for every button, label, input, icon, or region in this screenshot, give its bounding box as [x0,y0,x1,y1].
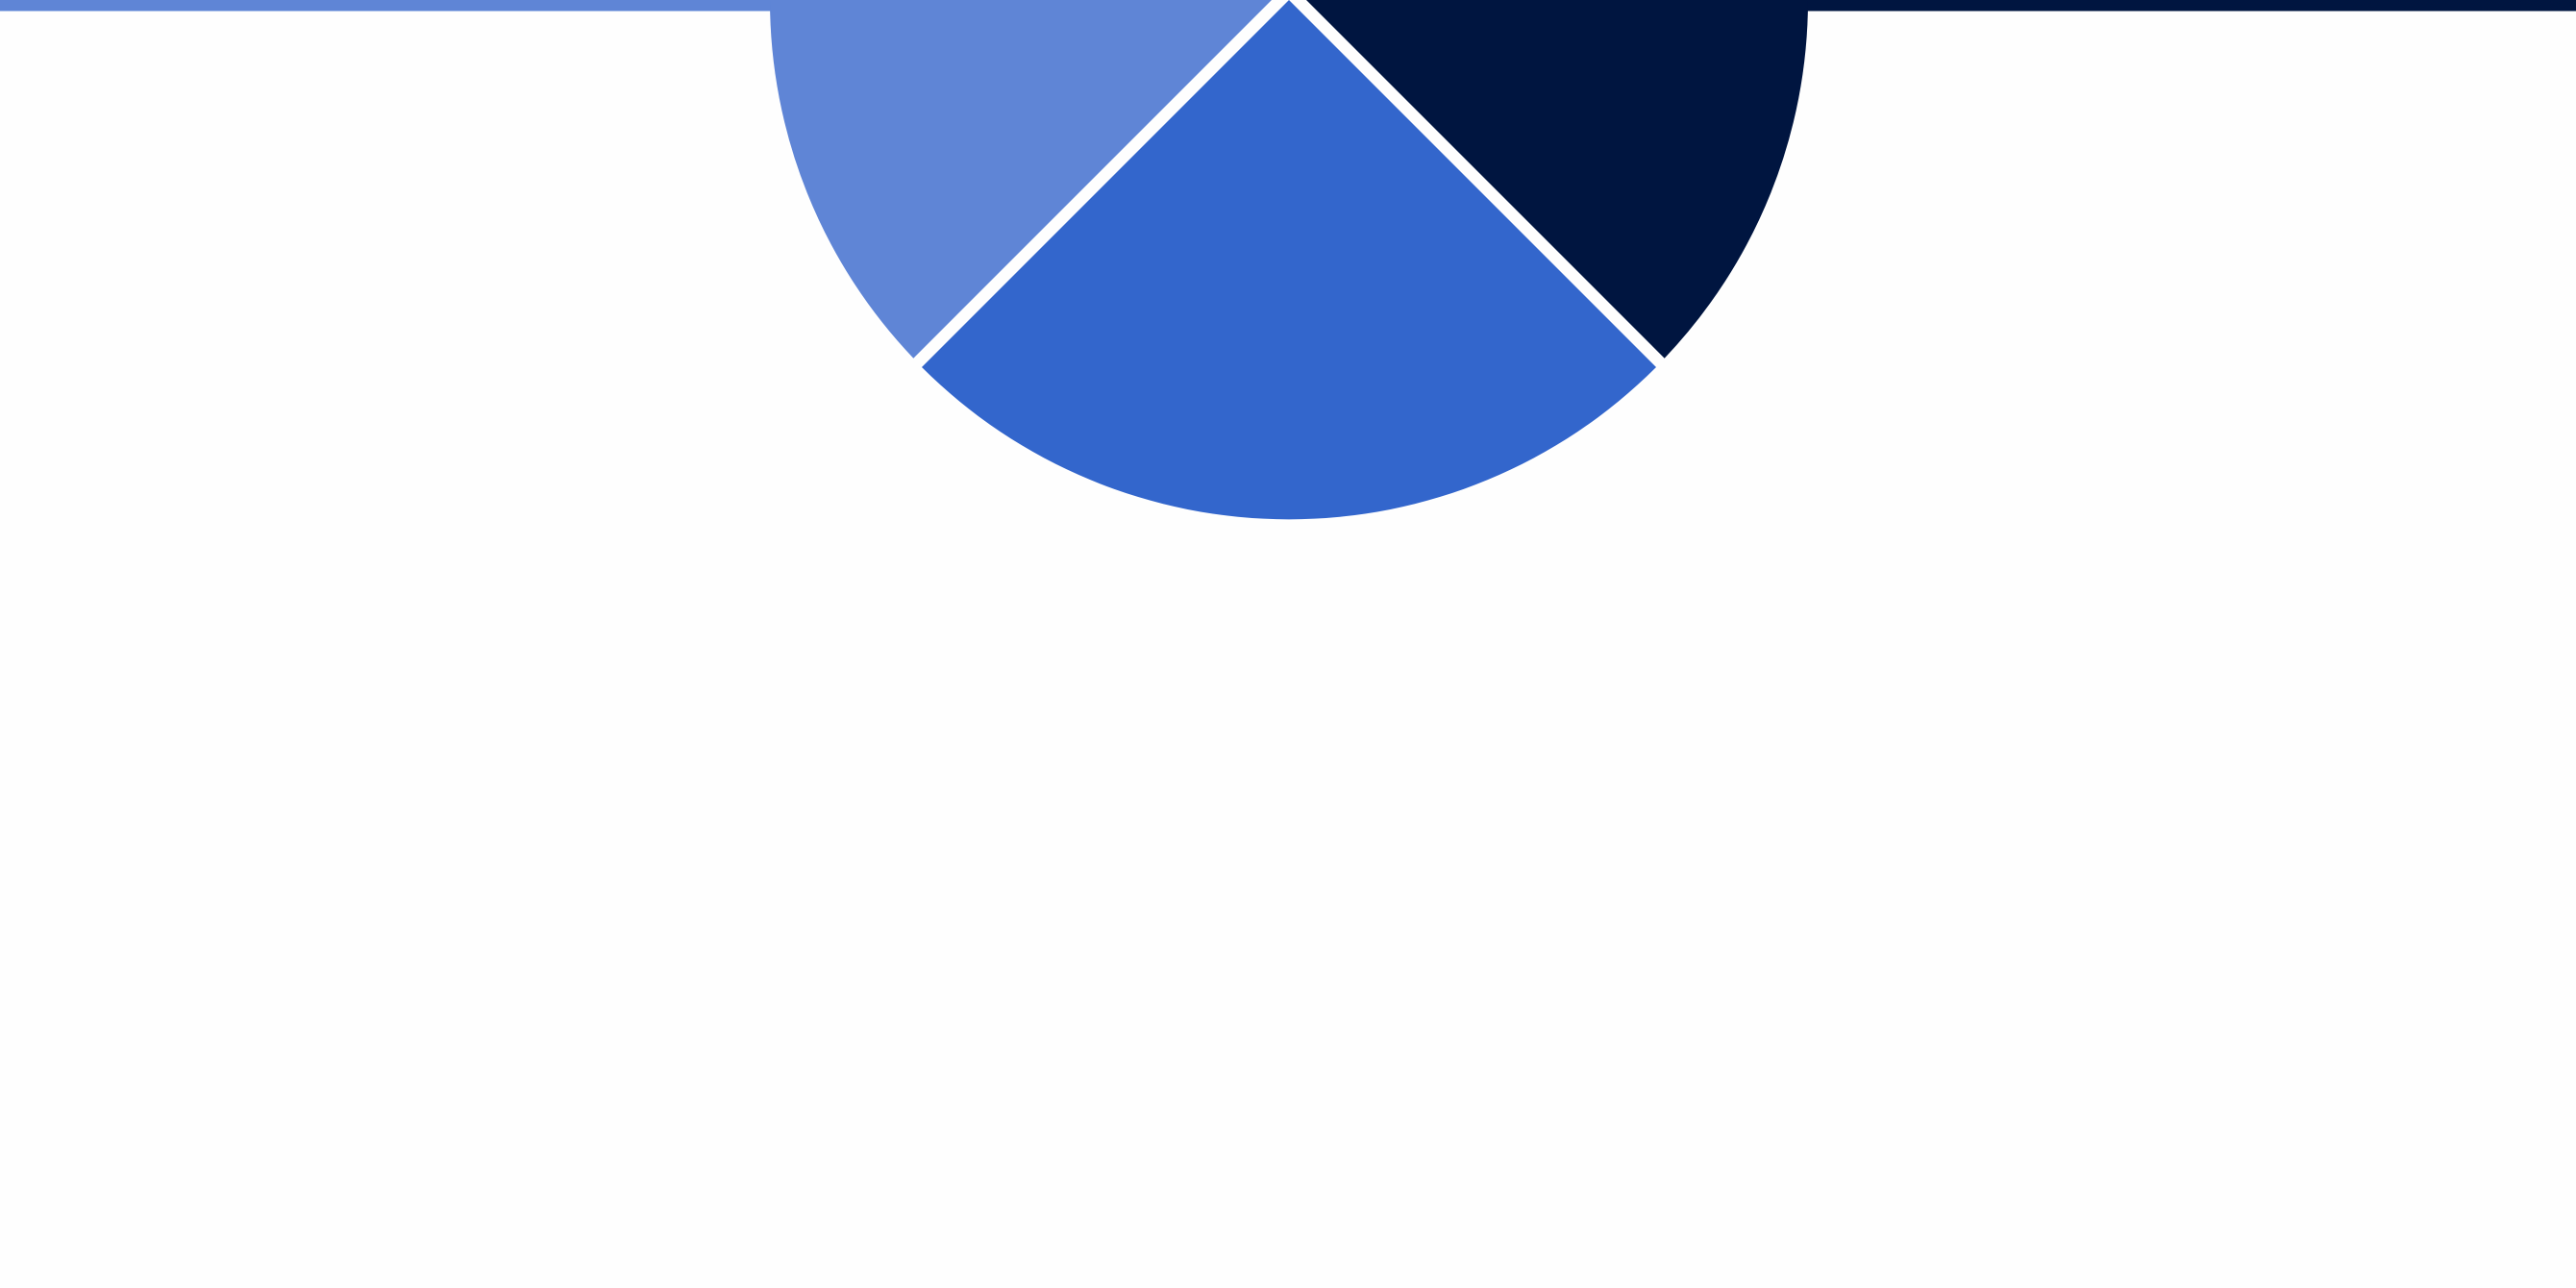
wedge: navy right segment [1306,0,1808,359]
top bar: navy [1797,0,2576,12]
wedge: mid blue bottom segment [922,0,1656,519]
top bar: light blue [0,0,779,12]
wedge: light blue left segment [770,0,1272,359]
